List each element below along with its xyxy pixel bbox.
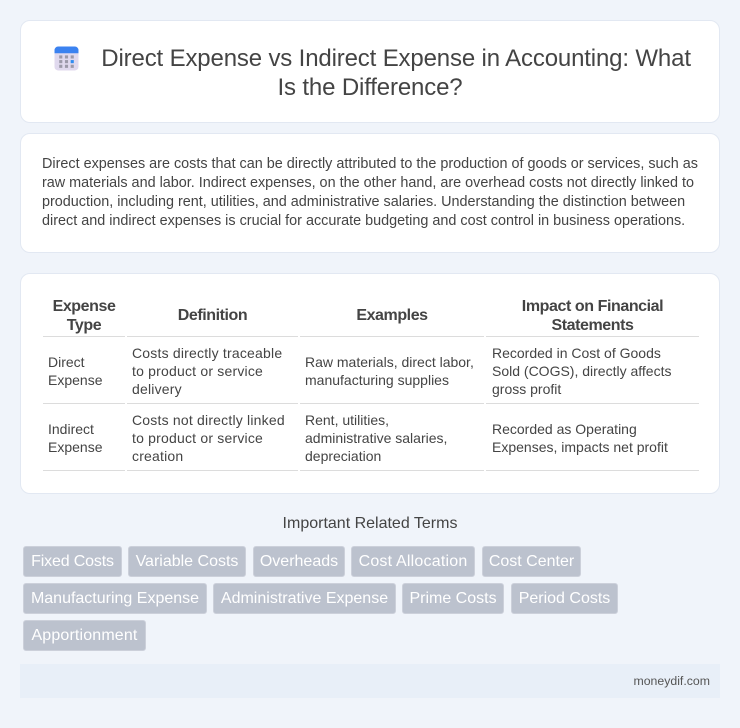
- table row: direct expense: gross profit: [492, 381, 561, 397]
- tag: Period Costs: [511, 583, 618, 614]
- panel: comparison table: [20, 273, 720, 494]
- panel: intro text: [20, 133, 720, 253]
- table header: Expense: [53, 298, 115, 315]
- title: Is the Difference?: [278, 74, 462, 101]
- tag: Manufacturing Expense: Manufacturing Expense: [31, 590, 199, 607]
- tag: Cost Allocation: [351, 546, 475, 577]
- tag: Overheads: [253, 546, 345, 577]
- tag: Fixed Costs: Fixed Costs: [31, 553, 114, 570]
- table row: direct expense: to product or service: [132, 363, 263, 379]
- table row: direct expense: [48, 345, 671, 397]
- text block: introduction: raw materials and labor. Indirect expenses, on the other hand, are overhead costs not directly linked to: [42, 175, 694, 191]
- tag: Period Costs: Period Costs: [519, 590, 610, 607]
- text block: introduction: [42, 156, 698, 229]
- footer bar: [20, 664, 720, 698]
- tag: Fixed Costs: [23, 546, 122, 577]
- tag: Manufacturing Expense: [23, 583, 207, 614]
- tag: Variable Costs: Variable Costs: [136, 553, 238, 570]
- table row: indirect expense: creation: [132, 448, 183, 464]
- tag: Administrative Expense: Administrative Expense: [221, 590, 388, 607]
- table row: indirect expense: [48, 412, 668, 464]
- table row: indirect expense: to product or service: [132, 430, 263, 446]
- table row: indirect expense: Indirect: [48, 421, 94, 437]
- tag: Apportionment: [23, 620, 146, 651]
- tag: Overheads: Overheads: [260, 553, 338, 570]
- table row: indirect expense: Expense: [48, 439, 102, 455]
- table header: Examples: [356, 307, 428, 324]
- table row: indirect expense: Expenses, impacts net profit: [492, 439, 668, 455]
- table row: direct expense: delivery: [132, 381, 182, 397]
- tag: Administrative Expense: [213, 583, 396, 614]
- footer source text: moneydif.com: [633, 674, 710, 688]
- text block: introduction: Direct expenses are costs that can be directly attributed to the production of goods or services, such as: [42, 156, 698, 172]
- tag: Variable Costs: [128, 546, 246, 577]
- panel: related term tags: [23, 546, 618, 651]
- tag: Cost Center: [482, 546, 581, 577]
- text block: introduction: direct and indirect expenses is crucial for accurate budgeting and cost control in business operations.: [42, 213, 685, 229]
- tag: Cost Center: Cost Center: [489, 553, 574, 570]
- tag: Prime Costs: Prime Costs: [409, 590, 497, 607]
- table header: [53, 298, 663, 334]
- table row: direct expense: manufacturing supplies: [305, 372, 449, 388]
- table row: direct expense: Direct: [48, 354, 85, 370]
- table header: Type: [67, 317, 101, 334]
- panel: title card: [20, 20, 720, 123]
- title: Direct Expense vs Indirect Expense in Accounting: What: [101, 45, 691, 72]
- table row: direct expense: Sold (COGS), directly affects: [492, 363, 671, 379]
- table header: Statements: [551, 317, 634, 334]
- table header: Impact on Financial: [522, 298, 663, 315]
- table row: direct expense: Recorded in Cost of Goods: [492, 345, 661, 361]
- heading: important related terms: Important Related Terms: [283, 515, 457, 532]
- icon: calendar: [54, 46, 78, 70]
- table row: indirect expense: Costs not directly linked: [132, 412, 285, 428]
- tag: Prime Costs: [402, 583, 504, 614]
- table header: Definition: [178, 307, 247, 324]
- table row: direct expense: Costs directly traceable: [132, 345, 282, 361]
- table row: direct expense: Expense: [48, 372, 102, 388]
- table row: indirect expense: Rent, utilities,: [305, 412, 389, 428]
- title: [101, 45, 691, 101]
- table row: indirect expense: depreciation: [305, 448, 381, 464]
- table row: indirect expense: Recorded as Operating: [492, 421, 637, 437]
- tag: Apportionment: Apportionment: [31, 627, 138, 644]
- tag: Cost Allocation: Cost Allocation: [359, 553, 467, 570]
- text block: introduction: production, including rent, utilities, and administrative salaries. Understanding the distinction between: [42, 194, 685, 210]
- table row: indirect expense: administrative salaries,: [305, 430, 447, 446]
- table row: direct expense: Raw materials, direct labor,: [305, 354, 474, 370]
